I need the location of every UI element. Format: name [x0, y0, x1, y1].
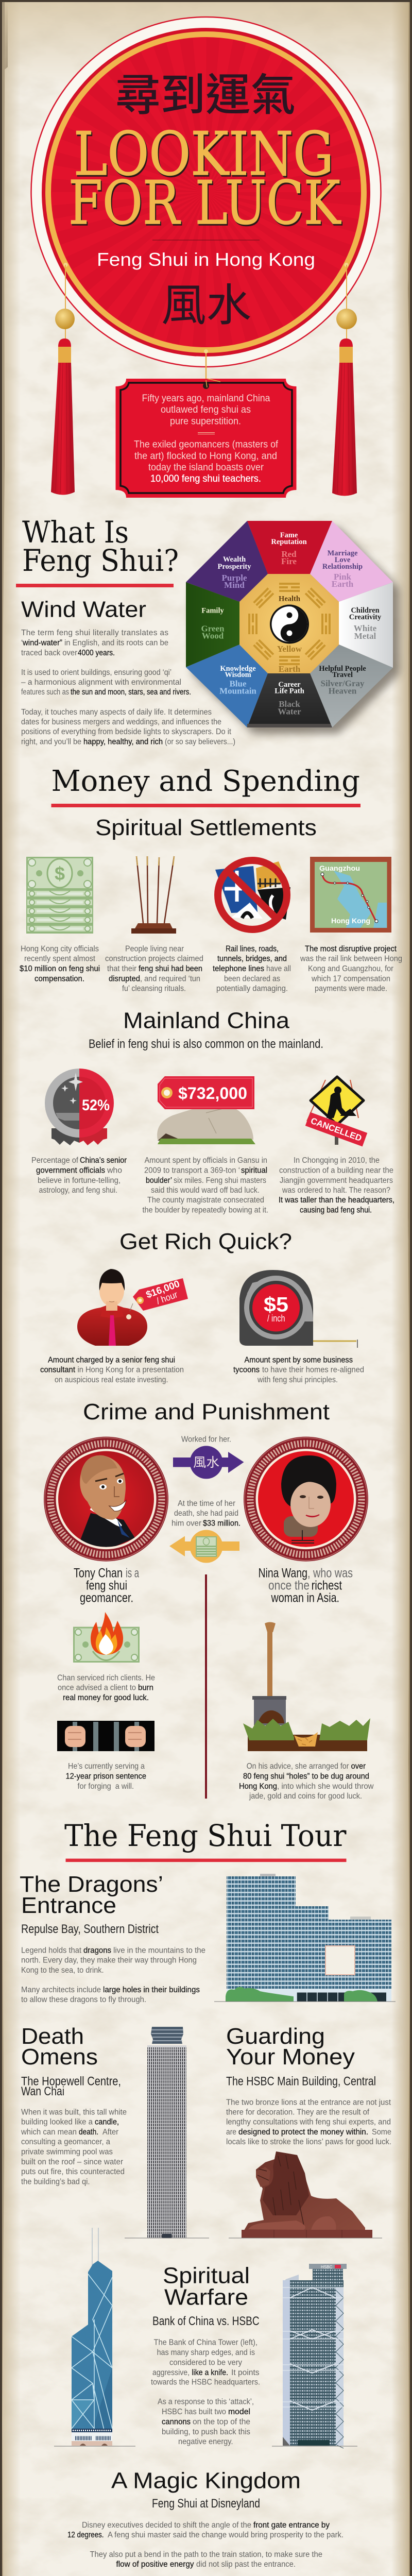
- text: feng shui holes: Hong Kong: [239, 1782, 277, 1791]
- bagua segment: children: White: [354, 623, 377, 633]
- text: chongqing building: [279, 1156, 394, 1215]
- bagua segment: career: Black: [279, 699, 300, 709]
- text: guarding your money: The HSBC Main Building, Central: [226, 2074, 376, 2089]
- bagua segment: career: [247, 673, 332, 727]
- text: guarding your money: Some: [372, 2128, 391, 2137]
- text: nina wang: [259, 1566, 353, 1605]
- bagua segment: helpful people: Silver/Gray: [321, 679, 365, 688]
- text: senior government officials: Percentage of: [31, 1156, 79, 1165]
- bagua segment: knowledge: Blue: [229, 679, 247, 688]
- bagua segment: knowledge: Knowledge: [220, 665, 256, 673]
- text: construction disruption: People living near: [125, 944, 184, 953]
- text: death omens: After: [102, 2128, 118, 2137]
- portrait: tony chan: [44, 1437, 168, 1562]
- text: business tycoons: [233, 1355, 364, 1384]
- text: the dragons entrance: [20, 1872, 205, 2004]
- text: the dragons entrance: live in the mountains to the: [113, 1946, 205, 1955]
- text: a magic kingdom: 12 degrees.: [67, 2531, 104, 2539]
- text: spiritual boulder: 2009 to transport a 369-ton ‘: [144, 1166, 240, 1175]
- bagua segment: wealth: Prosperity: [218, 563, 251, 571]
- right tassel: [332, 263, 357, 496]
- left tassel: [51, 263, 75, 495]
- text: feng shui holes: On his advice, she arranged for: [247, 1762, 349, 1771]
- bagua segment: helpful people: Helpful People: [319, 665, 366, 673]
- text: spiritual warfare: Warfare: [164, 2285, 248, 2310]
- arrow: purple right: 風水: [193, 1455, 219, 1470]
- heading: mainland china: Belief in feng shui is also common on the mainland.: [89, 1037, 323, 1051]
- text: spiritual warfare: It points: [231, 2368, 260, 2377]
- text: feng shui holes: [239, 1762, 374, 1801]
- plaque text: [134, 393, 279, 484]
- text: wind water: right, and you’ll be: [21, 738, 81, 746]
- text: death omens: When it was built, this tall white: [21, 2108, 127, 2116]
- text: paid 33 million: At the time of her: [178, 1499, 235, 1508]
- bagua segment: children: [339, 582, 393, 668]
- text: wind water: 4000 years.: [78, 649, 115, 657]
- icon: boulder with price tag: [157, 1076, 255, 1144]
- illustration: hsbc building: HSBC: [321, 2265, 332, 2269]
- bagua segment: marriage: Love: [335, 556, 351, 564]
- bagua segment: career: Life Path: [274, 687, 304, 696]
- text: senior government officials: government officials: [36, 1166, 105, 1175]
- main title: FOR LUCK: [68, 168, 341, 238]
- text: construction disruption: [105, 944, 203, 993]
- text: wind water: “: [21, 639, 23, 647]
- text: most disruptive project: payments were made.: [315, 985, 387, 993]
- icon: feng shui consultant: $16,000: [145, 1279, 181, 1301]
- bagua centre: health: Earth: [279, 664, 301, 674]
- heading: what is feng shui: [16, 515, 179, 587]
- text: burn real money: burn: [138, 1684, 153, 1692]
- text: hong kong officials: recently spent almost: [24, 955, 96, 963]
- text: death omens: private swimming pool was: [21, 2147, 113, 2157]
- icon: rail map: Guangzhou: [319, 864, 360, 872]
- hanging plaque: [115, 349, 297, 498]
- text: prison sentence: [66, 1762, 146, 1791]
- subheading: spiritual settlements: Spiritual Settlements: [95, 815, 317, 840]
- text: wind water: the sun and moon, stars, sea and rivers.: [71, 688, 191, 697]
- text: tony chan: Tony Chan: [74, 1566, 123, 1581]
- bagua segment: marriage: Relationship: [322, 563, 363, 571]
- heading: the feng shui tour: The Feng Shui Tour: [64, 1818, 347, 1853]
- text: burn real money: real money for good luck.: [63, 1693, 149, 1702]
- bagua segment: knowledge: [186, 645, 268, 727]
- text: tony chan: feng shui: [86, 1579, 127, 1593]
- text: spiritual warfare: Spiritual: [163, 2263, 250, 2289]
- text: spiritual warfare: has many sharp edges, and is: [157, 2348, 255, 2357]
- bagua segment: marriage: Pink: [334, 572, 352, 582]
- text: wind water: dates for business mergers and weddings, and influences the: [21, 718, 221, 726]
- text: senior consultant: consultant: [40, 1366, 76, 1375]
- bagua segment: family: Family: [201, 607, 224, 615]
- text: senior government officials: astrology, and feng shui.: [39, 1186, 117, 1195]
- medallion rings: [31, 17, 381, 367]
- text: hong kong officials: Hong Kong city officials: [21, 944, 99, 953]
- icon: feng shui consultant: [77, 1269, 188, 1346]
- text: rail lines and roads: have all: [266, 964, 291, 973]
- text: death omens: candle,: [95, 2118, 119, 2127]
- label: worked for her: Worked for her.: [181, 1435, 231, 1444]
- text: most disruptive project: which 17 compensation: [311, 974, 390, 983]
- text: spiritual boulder: The county magistrate consecrated: [147, 1196, 264, 1205]
- bagua segment: career: Water: [278, 707, 301, 716]
- bagua segment: helpful people: [310, 645, 393, 727]
- bagua centre: health: Yellow: [277, 644, 302, 654]
- text: spiritual warfare: As a response to this ‘attack’,: [158, 2398, 254, 2406]
- text: rail lines and roads: [213, 944, 291, 993]
- text: the dragons entrance: Kong to the sea, to drink.: [21, 1966, 104, 1975]
- text: wind water: Wind Water: [21, 597, 146, 622]
- text: most disruptive project: was the rail link between Hong: [300, 955, 402, 963]
- text: hong kong officials: compensation.: [35, 974, 84, 983]
- feng shui characters: 風水: [161, 281, 251, 330]
- text: the dragons entrance: north. Every day, they make their way through Hong: [21, 1956, 197, 1965]
- main title: LOOKING: [74, 120, 334, 189]
- illustration: hopewell centre tower: [125, 2027, 209, 2238]
- text: guarding your money: Your Money: [226, 2044, 355, 2070]
- text: a magic kingdom: They also put a bend in the path to the train station, to make sure the: [90, 2550, 322, 2559]
- bagua diagram: [186, 521, 399, 734]
- heading: get rich quick: Get Rich Quick?: [119, 1229, 292, 1254]
- text: senior government officials: believe in fortune-telling,: [38, 1176, 121, 1185]
- icon: tape measure: $5: [264, 1293, 288, 1316]
- text: nina wang: once the: [268, 1579, 310, 1593]
- bagua segment: knowledge: Mountain: [219, 686, 256, 696]
- text: construction disruption: feng shui had been: [139, 964, 202, 973]
- text: nina wang: , who was: [307, 1566, 353, 1581]
- text: construction disruption: disrupted: [109, 974, 140, 983]
- text: spiritual boulder: Amount spent by officials in Gansu in: [145, 1156, 267, 1165]
- text: feng shui holes: over: [351, 1762, 366, 1771]
- text: guarding your money: designed to protect the money within.: [238, 2128, 368, 2137]
- text: spiritual warfare: cannons: [162, 2417, 191, 2427]
- text: the dragons entrance: Many architects include: [21, 1986, 101, 1994]
- text: senior consultant: [40, 1355, 184, 1384]
- illustration: repulse bay building: [214, 1874, 396, 2002]
- text: the dragons entrance: dragons: [83, 1946, 111, 1955]
- text: wind water: [21, 597, 235, 746]
- bagua segment: helpful people: Travel: [332, 671, 353, 679]
- text: tony chan: geomancer.: [80, 1591, 133, 1605]
- text: spiritual warfare: aggressive,: [152, 2368, 190, 2377]
- text: prison sentence: He’s currently serving a: [68, 1762, 145, 1771]
- text: prison sentence: 12-year prison sentence: [66, 1772, 146, 1781]
- text: chongqing building: In Chongqing in 2010, the: [294, 1156, 380, 1165]
- text: wind water: wind-water”: [22, 639, 62, 647]
- text: senior consultant: on auspicious real estate investing.: [55, 1376, 168, 1384]
- text: death omens: Death: [21, 2024, 84, 2049]
- bagua segment: career: Career: [278, 681, 301, 689]
- heading: what is feng shui: What Is: [22, 515, 129, 550]
- heading: what is feng shui: Feng Shui?: [22, 543, 179, 578]
- chinese title: 尋到運氣: [115, 71, 296, 120]
- text: spiritual boulder: six miles. Feng shui masters: [174, 1176, 266, 1185]
- text: construction disruption: construction projects claimed: [105, 955, 203, 963]
- text: senior government officials: China’s senior: [80, 1156, 127, 1165]
- text: construction disruption: fu’ cleansing rituals.: [122, 985, 186, 993]
- text: spiritual warfare: like a knife.: [192, 2368, 228, 2377]
- text: a magic kingdom: Disney executives decided to shift the angle of the: [82, 2521, 251, 2530]
- icon: burning money: [73, 1612, 140, 1663]
- icon: yin yang: [270, 605, 309, 644]
- text: guarding your money: locals like to stroke the lions’ paws for good luck.: [226, 2138, 391, 2146]
- text: hong kong officials: [20, 944, 100, 983]
- text: chongqing building: Jiangjin government headquarters: [280, 1176, 393, 1185]
- text: a magic kingdom: flow of positive energy: [116, 2560, 194, 2569]
- text: spiritual warfare: building, to push back this: [162, 2428, 250, 2436]
- icon: stack of money: [26, 857, 93, 934]
- icon: incense sticks: [131, 856, 176, 934]
- text: chongqing building: causing bad feng shui.: [300, 1206, 372, 1215]
- icon: 52 percent medal: 52%: [82, 1097, 110, 1114]
- text: the dragons entrance: Legend holds that: [21, 1946, 82, 1955]
- bagua segment: fame: Red: [281, 549, 297, 559]
- heading: crime and punishment: Crime and Punishment: [83, 1399, 330, 1425]
- text: death omens: consulting a geomancer, a: [21, 2138, 110, 2146]
- icon: cancelled construction sign: [305, 1077, 367, 1146]
- bagua centre: health: Health: [279, 595, 300, 603]
- plaque text: today the island boasts over: [148, 462, 264, 473]
- bagua segment: wealth: Mind: [224, 580, 245, 590]
- bagua segment: family: Green: [201, 623, 225, 634]
- icon: cancelled construction sign: CANCELLED: [310, 1116, 363, 1143]
- text: guarding your money: lengthy consultations with feng shui experts, and: [226, 2118, 391, 2127]
- heading: mainland china: Mainland China: [123, 1008, 290, 1033]
- icon: prohibited infrastructure: [215, 860, 290, 929]
- arrow: gold left: [169, 1530, 239, 1563]
- text: wind water: traced back over: [21, 649, 77, 657]
- arrow: purple right: [173, 1446, 244, 1479]
- text: death omens: built on the roof – since water: [21, 2158, 123, 2166]
- text: business tycoons: to have their homes re-aligned: [262, 1366, 364, 1375]
- text: rail lines and roads: Rail lines, roads,: [226, 944, 279, 953]
- bagua segment: children: Children: [351, 606, 380, 615]
- text: a magic kingdom: did not slip past the entrance.: [196, 2560, 296, 2569]
- text: nina wang: woman in Asia.: [271, 1591, 339, 1605]
- text: wind water: Today, it touches many aspects of daily life. It determines: [21, 708, 212, 717]
- plaque text: the art) flocked to Hong Kong, and: [134, 451, 277, 462]
- text: business tycoons: with feng shui principles.: [257, 1376, 338, 1384]
- bagua segment: wealth: Wealth: [223, 555, 246, 564]
- bagua segment: children: Creativity: [349, 613, 382, 621]
- main title: [68, 120, 341, 238]
- text: spiritual boulder: [142, 1156, 268, 1215]
- text: paid 33 million: $33 million.: [203, 1519, 241, 1528]
- heading: money and spending: Money and Spending: [52, 765, 360, 798]
- text: spiritual boulder: said this would ward off bad luck.: [151, 1186, 260, 1195]
- text: spiritual warfare: on the top of the: [193, 2417, 250, 2427]
- icon: tape measure: [239, 1270, 357, 1348]
- text: guarding your money: [226, 2024, 391, 2146]
- text: guarding your money: are: [226, 2128, 236, 2137]
- plaque text: 10,000 feng shui teachers.: [150, 473, 261, 484]
- bagua segment: marriage: Earth: [332, 579, 354, 589]
- text: business tycoons: Amount spent by some business: [244, 1355, 353, 1364]
- text: most disruptive project: [300, 944, 402, 993]
- icon: tape measure: / inch: [267, 1313, 285, 1324]
- plaque text: Fifty years ago, mainland China: [142, 393, 270, 404]
- text: nina wang: Nina Wang: [259, 1566, 307, 1581]
- text: rail lines and roads: tunnels, bridges, and: [217, 955, 287, 963]
- text: death omens: building looked like a: [21, 2118, 93, 2127]
- text: spiritual warfare: towards the HSBC headquarters.: [151, 2378, 260, 2387]
- plaque text: pure superstition.: [170, 416, 241, 427]
- text: guarding your money: there for decoration. They are the result of: [226, 2108, 370, 2116]
- text: death omens: which can mean: [21, 2128, 77, 2137]
- text: burn real money: Chan serviced rich clients. He: [57, 1673, 155, 1682]
- text: spiritual boulder: the boulder by repeatedly bowing at it.: [142, 1206, 268, 1215]
- text: guarding your money: The two bronze lions at the entrance are not just: [226, 2098, 391, 2107]
- bagua segment: fame: Reputation: [271, 538, 307, 546]
- text: death omens: death.: [79, 2128, 98, 2137]
- text: hong kong officials: $10 million on feng shui: [20, 964, 100, 973]
- icon: feng shui consultant: / hour: [155, 1289, 179, 1306]
- text: death omens: the building’s bad qi.: [21, 2177, 90, 2186]
- text: tony chan: is a: [126, 1566, 139, 1581]
- text: senior government officials: who: [107, 1166, 122, 1175]
- text: wind water: positions of everything from bedside lights to skyscrapers. Do it: [21, 727, 232, 736]
- icon: shovel and hole: [243, 1622, 370, 1751]
- text: nina wang: richest: [312, 1579, 342, 1593]
- text: feng shui holes: jade, gold and coins for good luck.: [249, 1792, 362, 1801]
- bagua segment: wealth: [186, 521, 268, 602]
- text: wind water: The term feng shui literally translates as: [21, 629, 168, 637]
- text: wind water: – a harmonious alignment with environmental: [21, 678, 181, 687]
- illustration: bronze lion: [229, 2151, 382, 2238]
- subtitle: Feng Shui in Hong Kong: [97, 249, 315, 270]
- text: death omens: Wan Chai: [21, 2084, 64, 2098]
- plaque text: The exiled geomancers (masters of: [134, 439, 279, 450]
- text: rail lines and roads: telephone lines: [213, 964, 264, 973]
- bagua segment: wealth: Purple: [221, 573, 247, 583]
- text: the dragons entrance: Repulse Bay, Southern District: [21, 1922, 159, 1936]
- text: a magic kingdom: A Magic Kingdom: [111, 2468, 301, 2494]
- illustration: hsbc building: [272, 2264, 357, 2448]
- text: burn real money: [57, 1673, 155, 1702]
- text: wind water: It is used to orient buildings, ensuring good ‘qi’: [21, 668, 171, 677]
- text: spiritual warfare: considered to be very: [169, 2359, 242, 2367]
- plaque text: outlawed feng shui as: [161, 404, 251, 415]
- text: the dragons entrance: to allow these dragons to fly through.: [21, 1995, 146, 2004]
- bagua segment: family: [186, 582, 239, 667]
- text: most disruptive project: Kong and Guangzhou, for: [308, 964, 393, 973]
- bagua segment: knowledge: Wisdom: [225, 671, 251, 679]
- text: chongqing building: It was taller than the headquarters,: [279, 1196, 394, 1205]
- text: wind water: in English, and its roots can be: [64, 639, 168, 647]
- icon: rail map: [310, 857, 391, 933]
- text: prison sentence: for forging a will.: [77, 1782, 134, 1791]
- text: spiritual boulder: boulder’: [146, 1176, 172, 1185]
- text: feng shui holes: , into which she would throw: [277, 1782, 374, 1791]
- text: a magic kingdom: [67, 2468, 344, 2569]
- icon: rail map: Hong Kong: [331, 917, 370, 925]
- text: spiritual boulder: spiritual: [241, 1166, 267, 1175]
- text: wind water: happy, healthy, and rich: [83, 738, 163, 746]
- bagua segment: fame: Fame: [280, 531, 298, 539]
- text: burn real money: once advised a client to: [58, 1684, 136, 1692]
- text: wind water: features such as: [21, 688, 69, 697]
- text: construction disruption: that their: [107, 964, 136, 973]
- bagua centre: health: [239, 574, 339, 674]
- text: a magic kingdom: front gate entrance by: [253, 2521, 330, 2530]
- heading: mainland china: [89, 1008, 323, 1051]
- illustration: bank of china tower: [54, 2228, 135, 2446]
- text: chongqing building: construction of a building near the: [279, 1166, 393, 1175]
- text: death omens: [21, 2024, 127, 2186]
- text: spiritual warfare: HSBC has built two: [162, 2408, 226, 2416]
- text: rail lines and roads: been declared as: [224, 974, 280, 983]
- text: a magic kingdom: Feng Shui at Disneyland: [152, 2497, 260, 2511]
- text: construction disruption: , and required ‘tun: [140, 974, 200, 983]
- bagua segment: marriage: [310, 521, 393, 602]
- text: paid 33 million: [171, 1499, 241, 1528]
- portrait: nina wang: [244, 1437, 368, 1562]
- icon: 52 percent medal: [45, 1069, 114, 1145]
- bagua segment: marriage: Marriage: [328, 549, 358, 557]
- text: senior consultant: in Hong Kong for a presentation: [77, 1366, 184, 1375]
- bagua segment: fame: [247, 521, 332, 574]
- text: wind water: (or so say believers...): [165, 738, 235, 746]
- text: spiritual warfare: [151, 2263, 260, 2446]
- text: business tycoons: tycoons: [233, 1366, 260, 1375]
- text: death omens: The Hopewell Centre,: [21, 2074, 121, 2089]
- bagua segment: family: Wood: [202, 631, 224, 641]
- bagua segment: children: Metal: [354, 631, 376, 641]
- text: spiritual warfare: negative energy.: [178, 2437, 233, 2446]
- text: feng shui holes: 80 feng shui “holes” to be dug around: [243, 1772, 369, 1781]
- text: spiritual warfare: Bank of China vs. HSBC: [152, 2314, 260, 2328]
- text: spiritual warfare: The Bank of China Tower (left),: [153, 2338, 258, 2347]
- text: the dragons entrance: Entrance: [21, 1893, 116, 1918]
- text: most disruptive project: The most disruptive project: [305, 944, 397, 953]
- text: spiritual warfare: model: [228, 2408, 250, 2416]
- text: a magic kingdom: A feng shui master said the change would bring prosperity to the park.: [108, 2531, 344, 2539]
- text: tony chan: [74, 1566, 139, 1605]
- text: death omens: Omens: [21, 2044, 98, 2070]
- text: chongqing building: was ordered to halt. The reason?: [282, 1186, 390, 1195]
- text: rail lines and roads: potentially damaging.: [216, 985, 288, 993]
- title medallion: [31, 17, 381, 367]
- text: the dragons entrance: large holes in their buildings: [103, 1986, 200, 1994]
- bagua segment: fame: Fire: [281, 556, 297, 566]
- text: death omens: puts out fire, this counteracted: [21, 2167, 125, 2176]
- text: paid 33 million: him over: [171, 1519, 201, 1528]
- icon: prison hands: [57, 1721, 154, 1751]
- text: paid 33 million: death, she had paid: [174, 1509, 238, 1518]
- text: senior government officials: [31, 1156, 127, 1195]
- text: the dragons entrance: The Dragons’: [20, 1872, 163, 1897]
- icon: boulder with price tag: $732,000: [178, 1084, 247, 1103]
- text: guarding your money: Guarding: [226, 2024, 325, 2049]
- bagua segment: helpful people: Heaven: [329, 686, 357, 696]
- text: senior consultant: Amount charged by a senior feng shui: [48, 1355, 175, 1364]
